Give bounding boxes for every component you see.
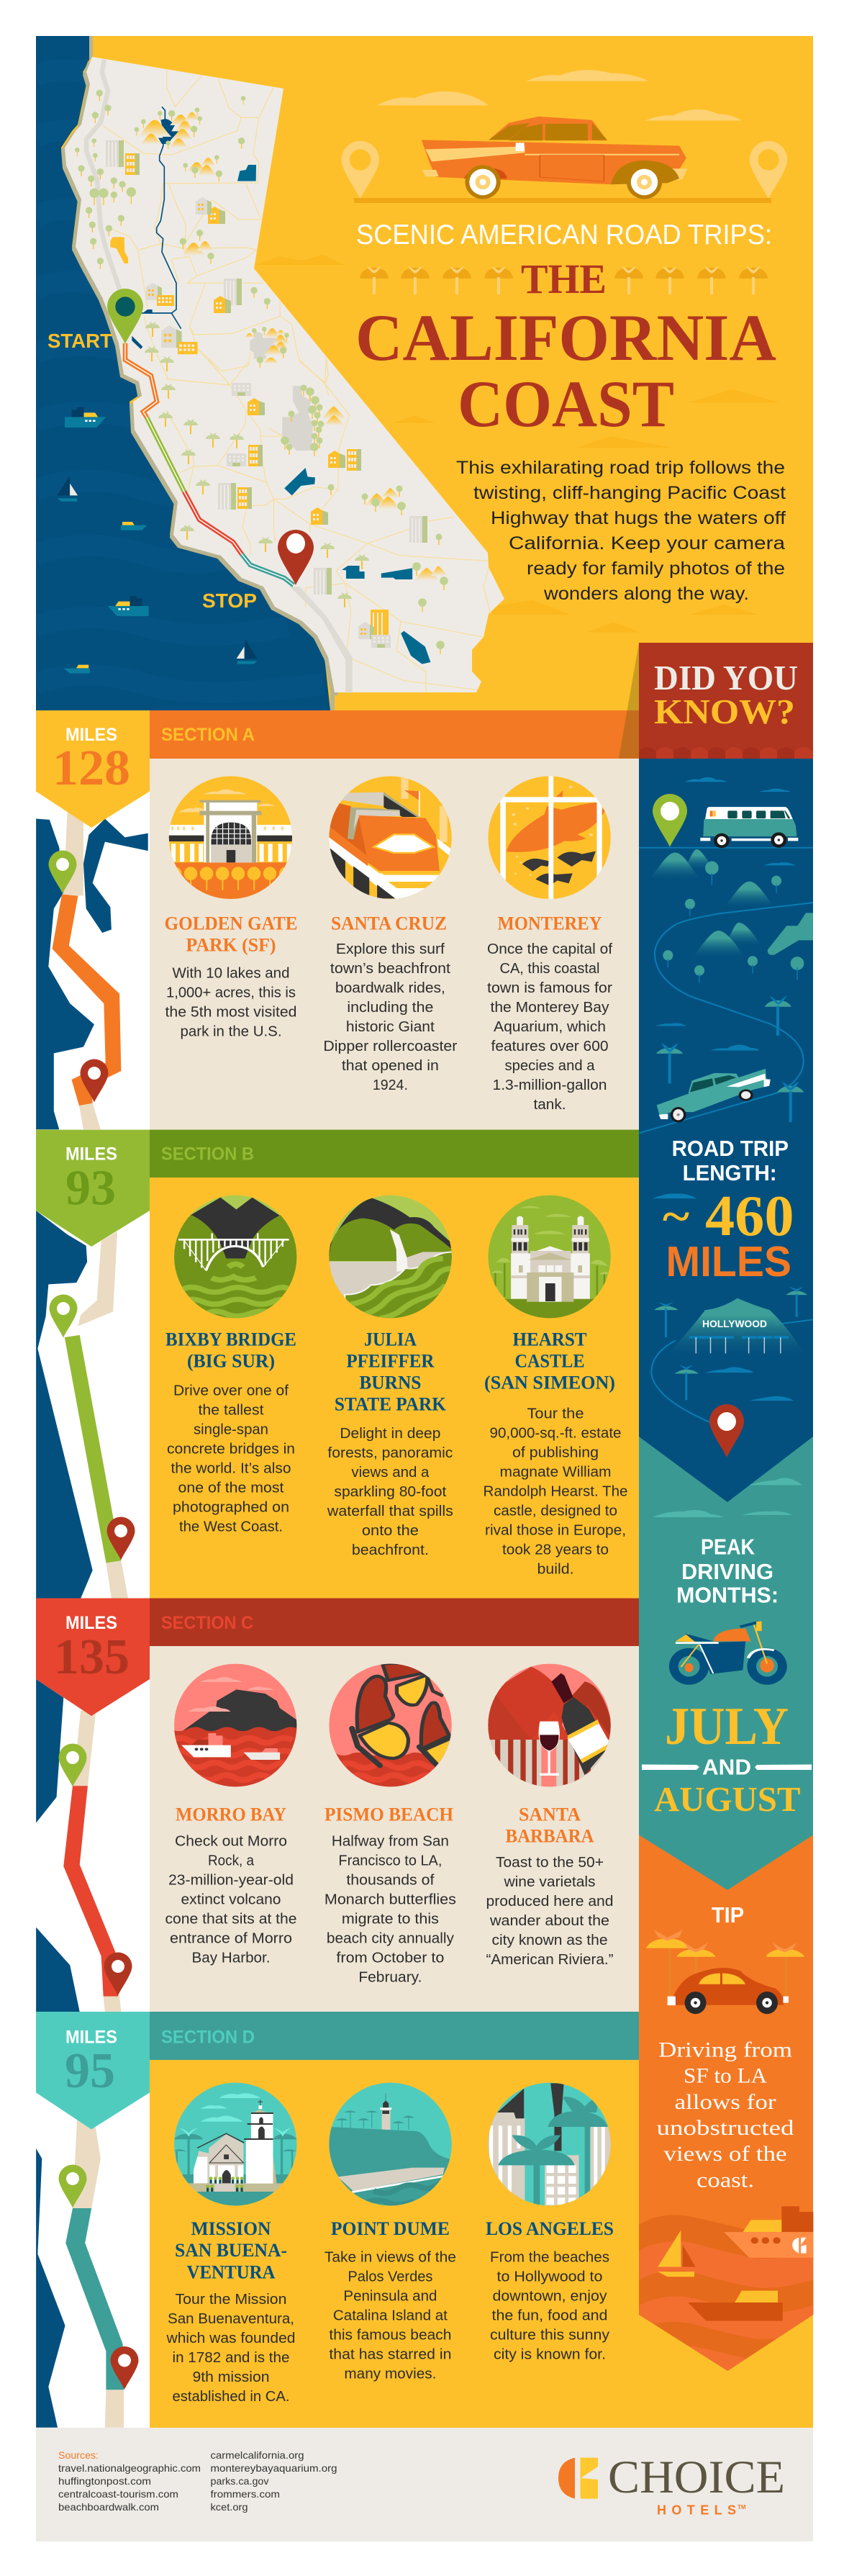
text: Los Angeles: downtown, enjoy [492, 2288, 607, 2304]
text: Hearst Castle: of publishing [512, 1445, 599, 1461]
title: THE [521, 256, 607, 302]
stat: 460 miles: MILES [666, 1238, 791, 1285]
text: Pismo Beach: migrate to this [342, 1911, 439, 1927]
text: Monterey: Once the capital of [487, 941, 612, 957]
text: Bixby Bridge: photographed on [173, 1499, 289, 1515]
text: Morro Bay: cone that sits at the [165, 1911, 296, 1927]
miles marker D: 95 [65, 2043, 115, 2099]
tip paragraph: allows for [675, 2090, 776, 2114]
text: July and August: AND [702, 1755, 751, 1780]
text: Hearst Castle: 90,000-sq.-ft. estate [489, 1425, 622, 1441]
text: Pismo Beach: Halfway from San [332, 1833, 449, 1849]
icon: beetle car and palms [646, 1930, 804, 2014]
icon: red vintage car [422, 117, 687, 199]
text: Golden Gate Park [164, 913, 298, 1039]
text: Bixby Bridge: single-span [194, 1422, 268, 1437]
logo: Choice Hotels: HOTELS [657, 2503, 736, 2518]
text: Golden Gate Park: the 5th most visited [165, 1005, 296, 1021]
text: Santa Barbara: SANTA [519, 1804, 581, 1825]
section C header bar: SECTION C [161, 1613, 253, 1633]
text: Julia Pfeiffer Burns: beachfront. [352, 1542, 429, 1558]
icon: Point Dume [329, 2083, 452, 2205]
text: Hearst Castle: CASTLE [515, 1351, 584, 1372]
text: Santa Cruz: historic Giant [346, 1019, 435, 1035]
miles marker C: 135 [54, 1630, 130, 1685]
panel: hero map and title [36, 36, 813, 713]
text: Bixby Bridge: the West Coast. [179, 1519, 283, 1535]
stat: 460 miles: 460 [705, 1185, 794, 1248]
logo: Choice Hotels: CHOICE [608, 2451, 785, 2503]
text: Santa Cruz: Dipper rollercoaster [323, 1039, 458, 1054]
ocean [36, 36, 338, 713]
text: Santa Barbara [486, 1804, 613, 1968]
text: Julia Pfeiffer Burns: sparkling 80-foot [334, 1484, 447, 1500]
hills on yellow background [255, 255, 781, 632]
text: Hearst Castle: (SAN SIMEON) [484, 1372, 615, 1393]
tip paragraph: views of the [663, 2142, 787, 2166]
text: Bixby Bridge [165, 1329, 296, 1535]
text: Mission San Buenaventura: San Buenaventura, [168, 2311, 294, 2327]
text: Pismo Beach: Monarch butterflies [325, 1892, 456, 1907]
text: Point Dume: this famous beach [329, 2327, 451, 2343]
stat: 460 miles: ~ [663, 1193, 689, 1240]
intro paragraph: ready for family photos of the [527, 559, 785, 579]
text: Julia Pfeiffer Burns: forests, panoramic [327, 1445, 453, 1461]
icon: motorcycle [669, 1622, 787, 1685]
heading: peak driving months: PEAK [701, 1534, 755, 1559]
text: Bixby Bridge: the world. It’s also [171, 1460, 291, 1476]
text: Pismo Beach: PISMO BEACH [325, 1804, 453, 1825]
panel: section D [36, 2012, 813, 2428]
sources column two [210, 2449, 337, 2513]
text: Julia Pfeiffer Burns: STATE PARK [335, 1393, 447, 1414]
text: Santa Barbara: city known as the [492, 1933, 607, 1948]
text: Julia Pfeiffer Burns: BURNS [359, 1372, 421, 1393]
text: Point Dume: that has starred in [329, 2346, 451, 2362]
tip banner [639, 1828, 813, 2372]
text: Los Angeles: city is known for. [494, 2346, 606, 2362]
text: Pismo Beach: Francisco to LA, [338, 1853, 442, 1868]
text: Hearst Castle: magnate William [499, 1464, 612, 1480]
text: Santa Cruz: 1924. [373, 1077, 408, 1093]
intro paragraph: wonders along the way. [543, 584, 749, 604]
title: COAST [458, 367, 674, 440]
text: Pismo Beach: February. [358, 1969, 422, 1985]
miles marker C [36, 1598, 150, 1716]
intro paragraph: Highway that hugs the waters off [491, 508, 786, 528]
text: Santa Barbara: wander about the [489, 1913, 609, 1929]
intro paragraph [456, 458, 786, 604]
icon: Los Angeles [488, 2083, 611, 2205]
icon: start pin [107, 289, 143, 344]
icon: Golden Gate Park [168, 776, 292, 899]
sources column one: Sources: [58, 2449, 99, 2461]
text: Santa Barbara: BARBARA [505, 1825, 594, 1846]
heading: road trip length [672, 1136, 789, 1185]
heading: tip: TIP [712, 1902, 744, 1928]
sources column one: huffingtonpost.com [58, 2475, 151, 2487]
sources column two: kcet.org [210, 2501, 248, 2513]
text: Point Dume: many movies. [344, 2366, 436, 2382]
peak driving months banner [639, 1432, 813, 1890]
text: Julia Pfeiffer Burns: onto the [362, 1523, 419, 1539]
text: Julia Pfeiffer Burns: PFEIFFER [346, 1351, 435, 1372]
text: Hearst Castle: Tour the [527, 1406, 584, 1422]
miles marker B: MILES [65, 1144, 117, 1165]
text: Morro Bay: Rock, a [208, 1853, 255, 1868]
teal car [689, 1073, 741, 1095]
sources column one [58, 2449, 201, 2513]
tip paragraph: coast. [696, 2168, 754, 2192]
text: Monterey [487, 913, 612, 1113]
route strip B [36, 1211, 135, 1599]
text: Monterey: 1.3-million-gallon [492, 1077, 607, 1093]
panel: section C [36, 1598, 639, 2012]
text: Morro Bay: extinct volcano [181, 1892, 281, 1907]
miles marker B: 93 [65, 1161, 116, 1216]
miles marker A: MILES [65, 725, 117, 745]
text: Mission San Buenaventura: established in CA. [173, 2389, 289, 2405]
heading: peak driving months: DRIVING [681, 1559, 773, 1584]
text: Monterey: the Monterey Bay [491, 1000, 609, 1016]
text: July and August: JULY [665, 1697, 789, 1756]
miles marker D: MILES [65, 2028, 117, 2048]
boats [57, 407, 257, 674]
text: Julia Pfeiffer Burns: views and a [351, 1465, 430, 1481]
icon: Bixby Bridge [174, 1195, 296, 1319]
text: Morro Bay: Bay Harbor. [191, 1950, 271, 1966]
section B header bar: SECTION B [161, 1144, 254, 1165]
icon: Pismo Beach butterflies [329, 1664, 452, 1786]
icon: Morro Bay [174, 1664, 296, 1786]
bus [704, 807, 796, 826]
text: Bixby Bridge: BIXBY BRIDGE [165, 1329, 296, 1350]
text: Santa Cruz [323, 913, 458, 1093]
text: Mission San Buenaventura: Tour the Mission [176, 2292, 286, 2308]
panel: footer [36, 2428, 813, 2541]
text: Hearst Castle: took 28 years to [502, 1542, 609, 1558]
text: Golden Gate Park: park in the U.S. [180, 1023, 282, 1039]
icon: red pin [709, 1404, 744, 1458]
road under car [354, 198, 771, 203]
miles marker A: 128 [53, 741, 130, 796]
palms [656, 1000, 804, 1093]
text: Hearst Castle: castle, designed to [494, 1503, 617, 1519]
sources column two: frommers.com [210, 2488, 280, 2500]
miles marker B [36, 1130, 150, 1247]
text: Santa Barbara: wine varietals [503, 1874, 596, 1890]
text: Pismo Beach: thousands of [346, 1872, 435, 1888]
text: Santa Cruz: SANTA CRUZ [331, 913, 447, 934]
section D header bar: SECTION D [161, 2028, 255, 2048]
text: Los Angeles: to Hollywood to [496, 2269, 603, 2284]
text: Mission San Buenaventura: MISSION [191, 2218, 271, 2239]
tip paragraph [656, 2038, 794, 2192]
section B header bar [150, 1130, 639, 1178]
text: Bixby Bridge: the tallest [199, 1402, 264, 1418]
text: Julia Pfeiffer Burns: waterfall that spills [327, 1504, 453, 1519]
text: Los Angeles: culture this sunny [490, 2327, 609, 2343]
text: Golden Gate Park: With 10 lakes and [173, 966, 289, 982]
text: Santa Cruz: including the [347, 1000, 433, 1016]
title [355, 256, 776, 440]
text: July and August: AUGUST [654, 1779, 800, 1819]
text: Pismo Beach: from October to [336, 1950, 444, 1966]
illustration: road with bus and car [639, 777, 813, 1133]
heading: road trip length: LENGTH: [683, 1160, 777, 1185]
label: stop: STOP [202, 589, 257, 612]
icon: Santa Cruz [329, 776, 452, 899]
text: Julia Pfeiffer Burns: Delight in deep [340, 1426, 440, 1442]
did you know header [619, 643, 813, 759]
text: Mission San Buenaventura: 9th mission [193, 2369, 269, 2385]
text: Point Dume: POINT DUME [331, 2218, 450, 2239]
text: Golden Gate Park: PARK (SF) [186, 934, 276, 955]
text: Santa Barbara: Toast to the 50+ [496, 1855, 604, 1871]
text: Morro Bay: MORRO BAY [176, 1804, 286, 1825]
did you know header: KNOW? [654, 692, 795, 731]
text: Monterey: CA, this coastal [499, 961, 600, 977]
text: Santa Barbara: “American Riviera.” [486, 1952, 613, 1968]
icon: Julia Pfeiffer Burns [329, 1195, 452, 1319]
text: Hearst Castle: HEARST [512, 1329, 587, 1350]
text: Los Angeles: From the beaches [490, 2249, 609, 2265]
text: Los Angeles: LOS ANGELES [486, 2218, 614, 2239]
icon: orange sea with boats [639, 2206, 813, 2372]
section D header bar [150, 2012, 639, 2060]
heading: peak driving months: MONTHS: [676, 1582, 779, 1607]
icon: green pin [653, 794, 687, 847]
miles marker D [36, 2012, 150, 2129]
text: Monterey: MONTEREY [498, 913, 602, 934]
text: Morro Bay: entrance of Morro [170, 1930, 292, 1946]
river [142, 107, 181, 329]
text: Santa Cruz: boardwalk rides, [335, 980, 445, 996]
text: Point Dume: Take in views of the [325, 2249, 456, 2265]
logo: Choice Hotels: TM [738, 2504, 746, 2511]
text: Julia Pfeiffer Burns: JULIA [364, 1329, 417, 1350]
sources column two: montereybayaquarium.org [210, 2462, 337, 2474]
icon: Monterey aquarium [488, 776, 611, 899]
tip paragraph: unobstructed [656, 2116, 794, 2140]
icon: Hearst Castle [488, 1195, 611, 1319]
text: Bixby Bridge: one of the most [178, 1480, 284, 1496]
text: Mission San Buenaventura: which was founded [165, 2331, 295, 2346]
map of California [61, 57, 504, 695]
text: Point Dume: Palos Verdes [348, 2269, 432, 2284]
section C header bar [150, 1598, 639, 1646]
intro paragraph: This exhilarating road trip follows the [456, 458, 785, 478]
text: Hearst Castle: build. [537, 1562, 574, 1578]
text: Santa Cruz: Explore this surf [336, 941, 445, 957]
text: Point Dume: Peninsula and [343, 2288, 437, 2304]
text: Bixby Bridge: Drive over one of [173, 1383, 289, 1398]
text: Monterey: tank. [534, 1097, 566, 1113]
sources column one: beachboardwalk.com [58, 2501, 159, 2513]
intro paragraph: twisting, cliff-hanging Pacific Coast [473, 483, 786, 503]
route strip C [36, 1679, 132, 2012]
sources column one: centralcoast-tourism.com [58, 2488, 178, 2500]
text: Mission San Buenaventura: VENTURA [187, 2261, 276, 2282]
text: Mission San Buenaventura: SAN BUENA- [175, 2240, 287, 2261]
text: July and August [642, 1697, 812, 1819]
sources column one: travel.nationalgeographic.com [58, 2462, 201, 2474]
text: Bixby Bridge: concrete bridges in [167, 1441, 295, 1457]
section A header bar [150, 710, 639, 759]
decorative palm row [360, 266, 768, 294]
icon: stop pin [278, 530, 314, 585]
icon: pale location pins [341, 141, 787, 199]
heading: peak driving months [676, 1534, 779, 1607]
stat: 460 miles [663, 1185, 794, 1285]
text: Monterey: town is famous for [487, 980, 612, 996]
miles marker C: MILES [65, 1613, 117, 1633]
tip paragraph: SF to LA [684, 2064, 767, 2088]
text: Golden Gate Park: GOLDEN GATE [164, 913, 298, 934]
heading: road trip length: ROAD TRIP [672, 1136, 789, 1161]
icon: Santa Barbara wine [488, 1664, 611, 1786]
text: Monterey: species and a [505, 1058, 595, 1074]
text: Bixby Bridge: (BIG SUR) [187, 1351, 275, 1372]
text: Hearst Castle: Randolph Hearst. The [484, 1484, 627, 1500]
tip paragraph: Driving from [658, 2038, 792, 2061]
route strip D [36, 2120, 138, 2428]
logo: Choice Hotels [558, 2451, 785, 2518]
panel: section A [36, 710, 639, 1130]
clouds [377, 70, 742, 121]
text: Santa Cruz: town’s beachfront [330, 961, 450, 977]
text: Hearst Castle: rival those in Europe, [485, 1523, 626, 1539]
route line [125, 343, 294, 585]
text: Pismo Beach: beach city annually [327, 1930, 454, 1946]
label: start: START [47, 330, 112, 352]
icon: Mission San Buenaventura [174, 2083, 296, 2205]
text: Point Dume [325, 2218, 456, 2382]
text: Pismo Beach [325, 1804, 456, 1985]
text: Golden Gate Park: 1,000+ acres, this is [166, 985, 296, 1000]
text: Los Angeles [486, 2218, 614, 2362]
text: Los Angeles: the fun, food and [492, 2308, 607, 2323]
title: CALIFORNIA [355, 301, 776, 374]
panel: section B [36, 1130, 639, 1599]
text: Morro Bay: Check out Morro [175, 1833, 287, 1849]
illustration: Hollywood hills [651, 1193, 813, 1422]
route strip A [36, 813, 148, 1129]
tip text and illustration [646, 1902, 804, 2192]
sources column two: carmelcalifornia.org [210, 2449, 304, 2461]
text: Monterey: features over 600 [491, 1039, 609, 1054]
text: Mission San Buenaventura: in 1782 and is the [173, 2350, 289, 2366]
text: Monterey: Aquarium, which [494, 1019, 606, 1035]
subtitle: SCENIC AMERICAN ROAD TRIPS: [356, 220, 772, 250]
road trip length banner [639, 759, 813, 1502]
text: Santa Cruz: that opened in [342, 1058, 439, 1074]
intro paragraph: California. Keep your camera [509, 533, 785, 553]
did you know header: DID YOU [654, 658, 798, 697]
sign: Hollywood: HOLLYWOOD [702, 1318, 767, 1329]
text: Santa Barbara: produced here and [486, 1894, 613, 1910]
text: Mission San Buenaventura [165, 2218, 295, 2405]
miles marker A [36, 710, 150, 828]
text: Point Dume: Catalina Island at [333, 2308, 448, 2323]
sources column two: parks.ca.gov [210, 2475, 269, 2487]
section A header bar: SECTION A [161, 725, 255, 745]
text: Julia Pfeiffer Burns [327, 1329, 453, 1558]
text: Hearst Castle [484, 1329, 627, 1578]
panel: sidebar did you know [619, 643, 813, 2372]
text: Morro Bay: 23-million-year-old [168, 1872, 294, 1888]
text: Morro Bay [165, 1804, 296, 1966]
